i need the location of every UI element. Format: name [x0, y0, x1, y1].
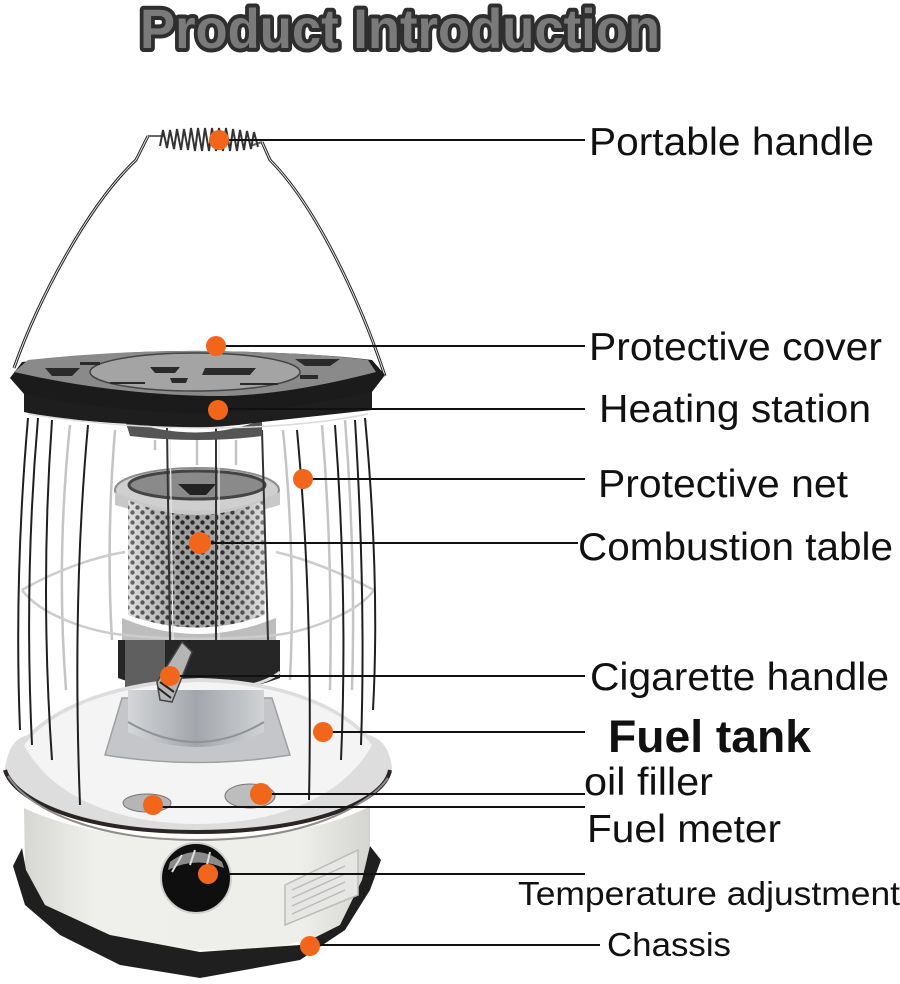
heating station band: [24, 390, 372, 440]
front cage wires: [18, 418, 375, 805]
spec sticker: [285, 850, 358, 925]
back cage wires: [62, 420, 353, 690]
orange markers: [143, 130, 333, 956]
label: protective net: Protective net: [598, 463, 848, 506]
label: cigarette handle: Cigarette handle: [590, 656, 889, 699]
cage ring: [22, 552, 374, 639]
label: portable handle: Portable handle: [589, 121, 874, 164]
label: heating station: Heating station: [599, 388, 871, 431]
oil filler and fuel meter: [123, 784, 275, 812]
label: fuel meter: Fuel meter: [587, 808, 781, 851]
label: oil filler: oil filler: [584, 761, 713, 804]
burner base plate: [105, 690, 290, 762]
protective cover lid: [10, 351, 385, 414]
leader lines: [153, 140, 600, 945]
label: chassis: Chassis: [607, 926, 731, 963]
tank rim: [5, 770, 390, 840]
temperature knob: [161, 843, 231, 913]
chassis: [13, 846, 381, 978]
burner top: [115, 468, 280, 518]
label: fuel tank: Fuel tank: [608, 711, 812, 762]
heater illustration: [5, 128, 392, 978]
tank body: [24, 806, 370, 950]
burner collar: [118, 640, 280, 693]
cigarette handle: [157, 642, 192, 702]
label: protective cover: Protective cover: [589, 326, 882, 369]
label: combustion table: Combustion table: [578, 526, 893, 569]
combustion mesh cylinder: [122, 500, 276, 642]
tank top plate: [5, 678, 392, 832]
portable handle wire: [14, 128, 385, 376]
label: temperature adjustment: Temperature adjustment: [518, 875, 900, 912]
